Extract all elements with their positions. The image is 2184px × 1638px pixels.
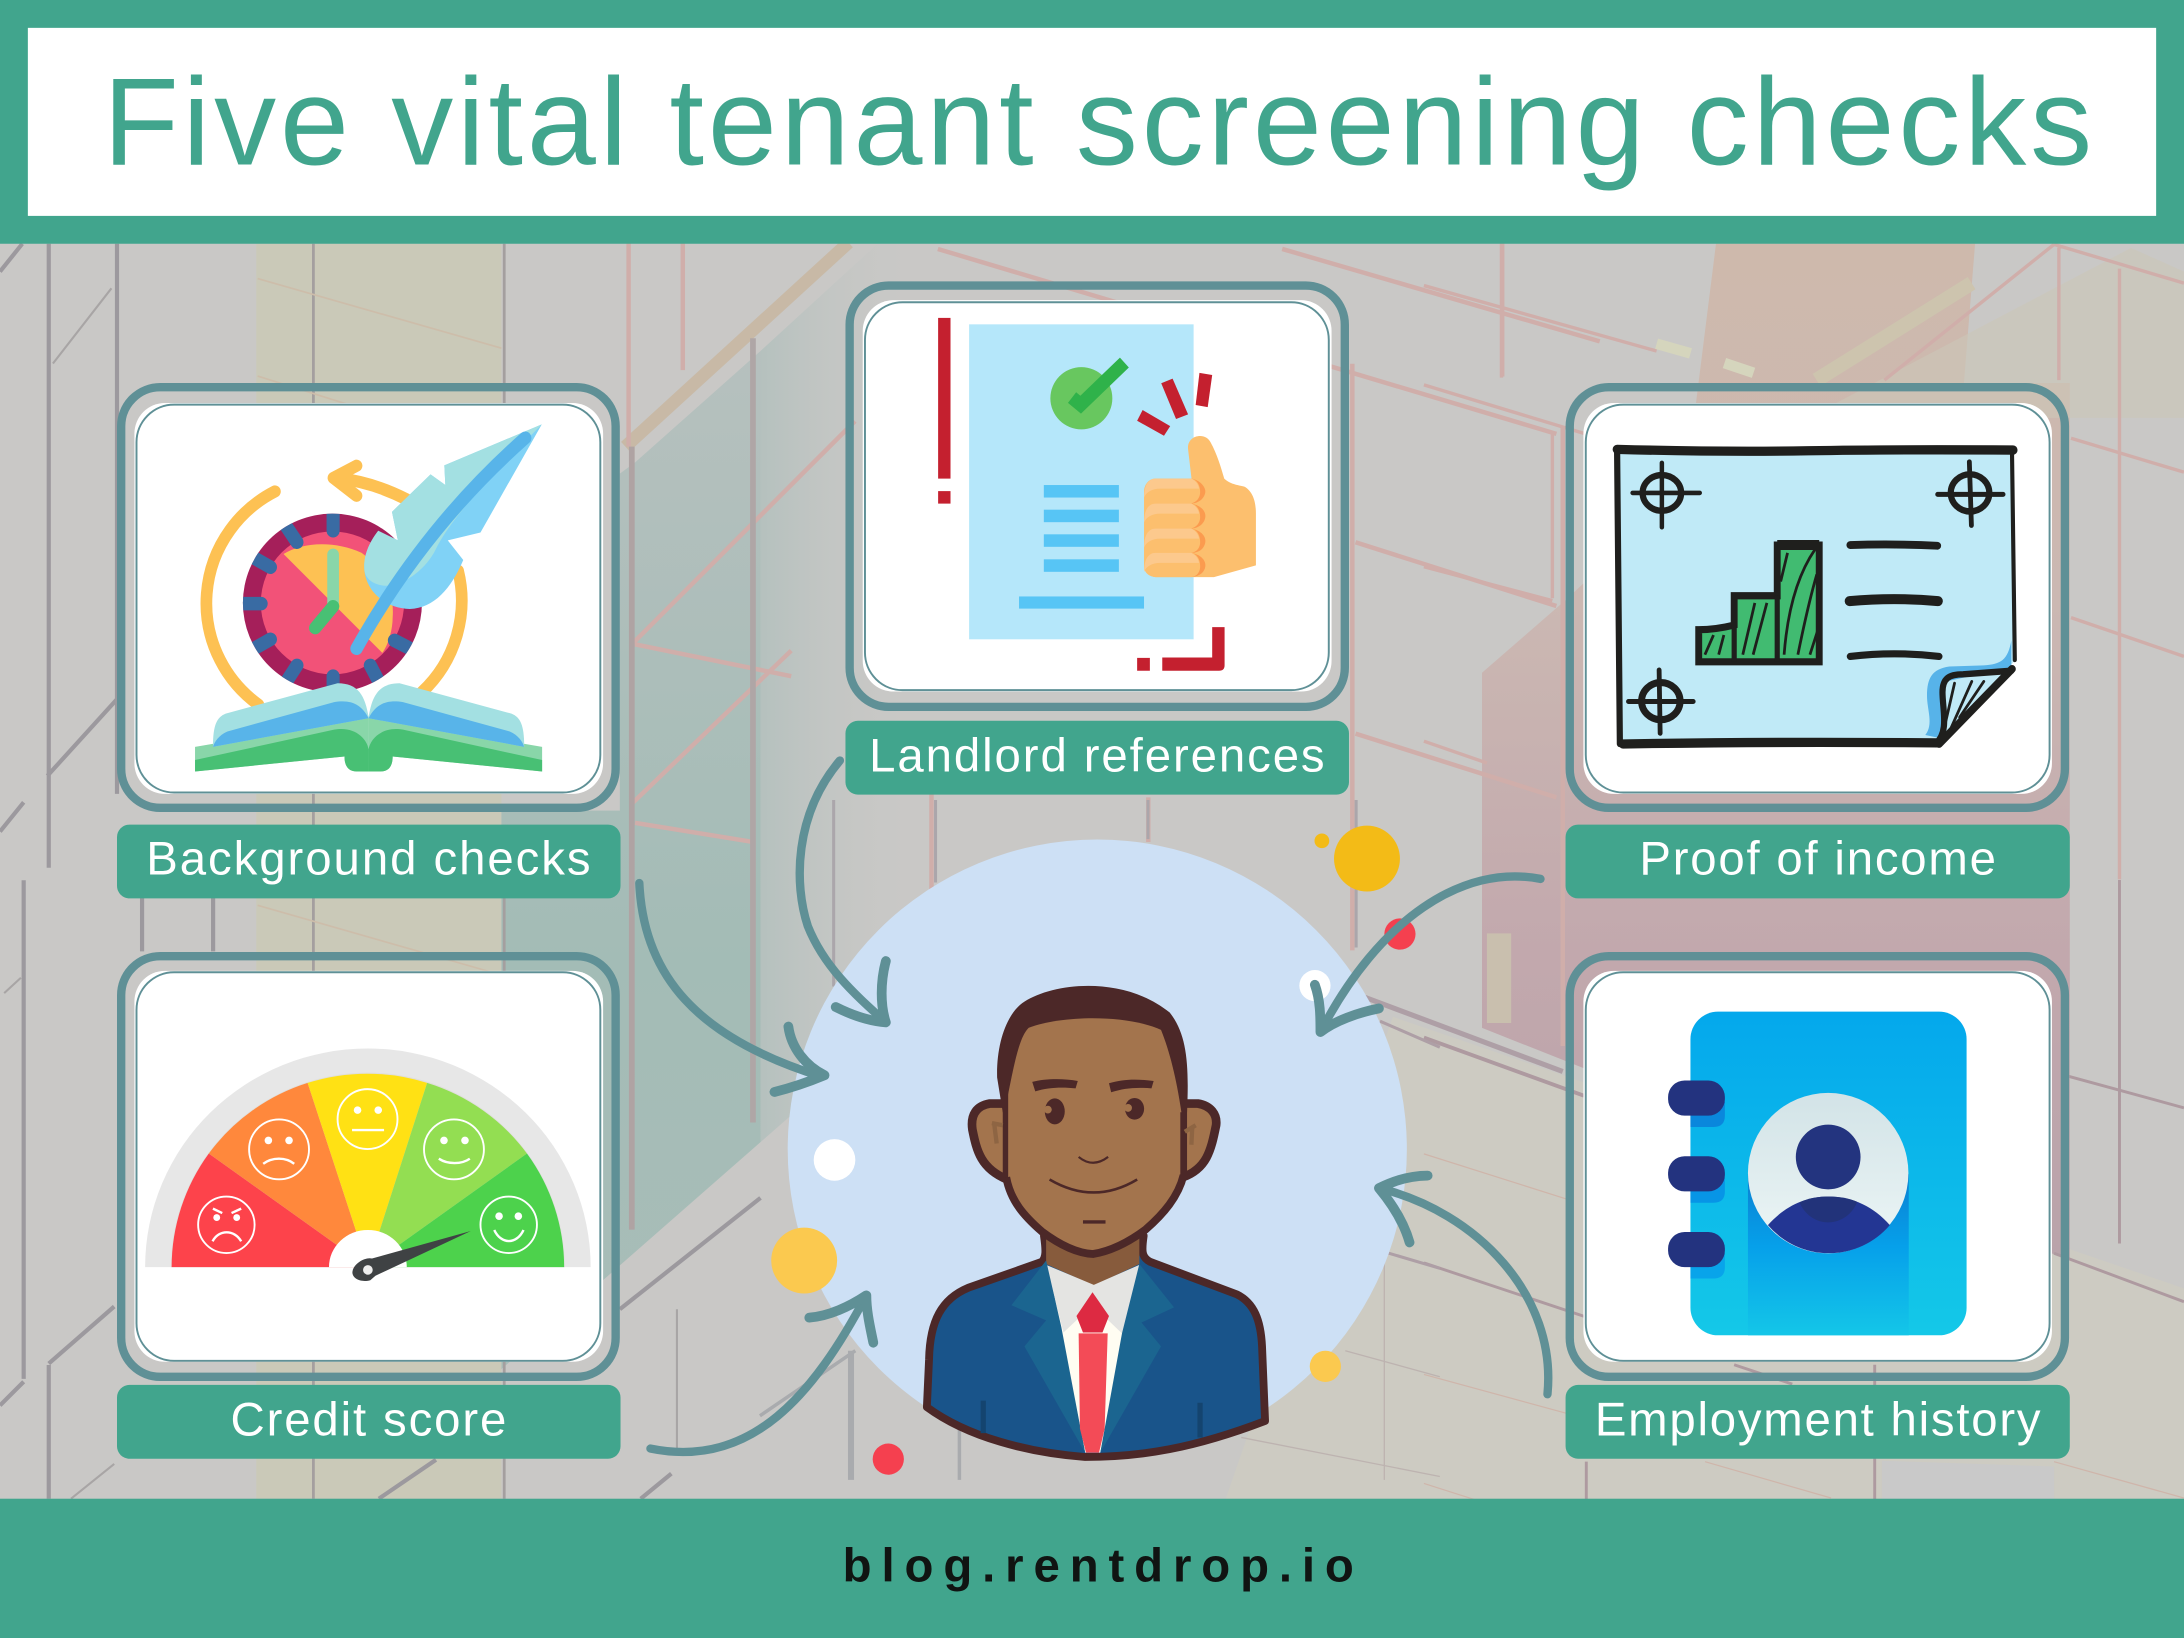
label: employment history bbox=[1566, 1385, 2070, 1459]
panel: employment history bbox=[1570, 956, 2065, 1377]
label: credit score: Credit score bbox=[231, 1393, 506, 1446]
icon: address book with person bbox=[1668, 1012, 1967, 1335]
panel: credit score bbox=[121, 956, 616, 1377]
icon: income certificate with bar chart bbox=[1616, 449, 2015, 745]
arrow: credit score to tenant bbox=[650, 1295, 873, 1452]
label: landlord references: Landlord references bbox=[869, 730, 1325, 783]
icon: credit score gauge bbox=[145, 1048, 591, 1281]
arrow: landlord references to tenant bbox=[800, 760, 886, 1022]
background: building photo bbox=[0, 243, 2184, 1500]
center: tenant portrait in circle bbox=[771, 826, 1416, 1475]
person bbox=[927, 986, 1265, 1457]
label: employment history: Employment history bbox=[1595, 1393, 2041, 1446]
icon: reference document with thumbs up bbox=[938, 318, 1256, 671]
label: landlord references bbox=[845, 721, 1349, 795]
decorative dots bbox=[771, 826, 1416, 1475]
header band bbox=[0, 0, 2184, 244]
arrow: employment history to tenant bbox=[1379, 1176, 1548, 1394]
panel: proof of income bbox=[1570, 387, 2065, 808]
label: background checks: Background checks bbox=[146, 833, 591, 886]
footer band bbox=[0, 1499, 2184, 1638]
icon: clock, feather and open book bbox=[195, 424, 542, 771]
arrow: background checks to tenant bbox=[639, 883, 825, 1092]
label: proof of income: Proof of income bbox=[1639, 833, 1996, 886]
label: background checks bbox=[117, 825, 621, 898]
label: credit score bbox=[117, 1385, 621, 1459]
panel: background checks bbox=[121, 387, 616, 808]
panel: landlord references bbox=[850, 286, 1345, 707]
footer url: blog.rentdrop.io bbox=[843, 1540, 1354, 1593]
title: Five vital tenant screening checks bbox=[103, 53, 2092, 191]
arrow: proof of income to tenant bbox=[1315, 876, 1540, 1032]
label: proof of income bbox=[1566, 825, 2070, 898]
